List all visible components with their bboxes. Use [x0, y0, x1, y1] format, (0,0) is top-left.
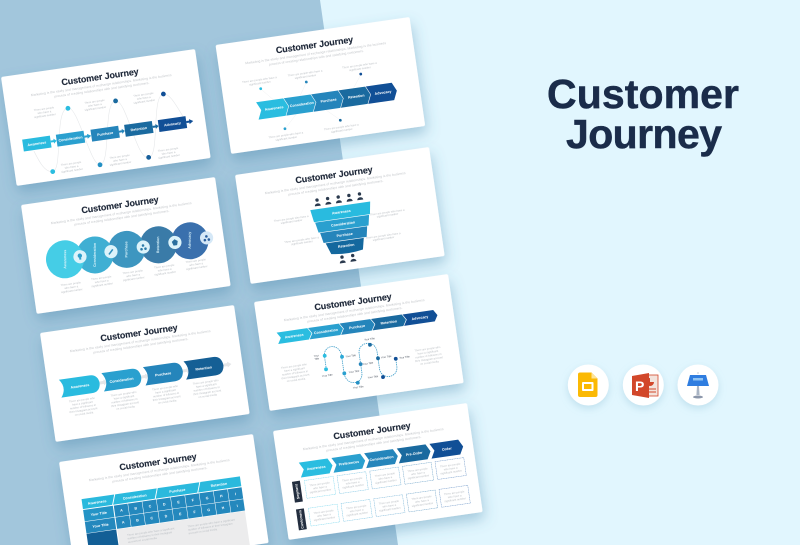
box text: significant number: [444, 496, 466, 503]
circle labels: significant number: [123, 275, 145, 282]
box text: [308, 462, 466, 522]
description: Marketing is the study and management of exchange relationships. Marketing is the business: [265, 171, 406, 195]
main title: Customer: [547, 71, 739, 117]
box text: who have a: [448, 493, 462, 499]
box text: who have a: [317, 512, 332, 518]
marker labels: significant number: [158, 153, 180, 160]
box text: who have a: [411, 470, 426, 476]
box text: There are people: [411, 494, 432, 501]
circle icons: [72, 230, 214, 264]
stage descriptions: have a significant: [196, 382, 217, 389]
panel: funnel journey slide: [235, 147, 445, 284]
description: Marketing is the study and management of exchange relationships. Marketing is the business: [70, 329, 211, 353]
chevron stages: Awareness: [265, 105, 284, 112]
marker labels: significant number: [275, 135, 298, 142]
box text: who have a: [444, 466, 458, 472]
chevron stages: [277, 310, 438, 344]
panel: curved arrows journey slide: [40, 305, 250, 442]
node labels: Your Title: [362, 361, 374, 366]
marker labels: significant number: [34, 112, 56, 119]
description: Marketing is the study and management of exchange relationships. Marketing is the business: [31, 73, 172, 97]
header stages: [82, 476, 241, 509]
marker labels: significant number: [294, 73, 317, 80]
heading: Customer Journey: [100, 322, 178, 343]
funnel: Purchase: [336, 232, 353, 238]
marker labels: significant number: [133, 98, 156, 105]
main title: Journey: [566, 111, 722, 157]
stage blocks: Consideration: [58, 135, 83, 143]
heading: Customer Journey: [314, 291, 392, 312]
stage descriptions: on social media: [158, 398, 177, 405]
curved stage shapes: Retention: [195, 365, 212, 372]
chevron stages: Purchase: [349, 324, 365, 330]
node labels: Your: [313, 353, 319, 358]
stage blocks: [22, 115, 194, 152]
funnel: [310, 201, 377, 258]
description: process of creating relationships with and satisfying customers.: [269, 49, 364, 67]
icon: powerpoint: [623, 364, 664, 406]
box text: who have a: [378, 475, 393, 481]
side paragraphs: on social media: [286, 376, 306, 383]
box text: who have a: [415, 498, 430, 504]
chevron stages: Consideration: [369, 455, 394, 462]
curved stage shapes: Awareness: [70, 383, 90, 390]
box text: There are people: [313, 508, 334, 515]
description: Marketing is the study and management of exchange relationships. Marketing is the business: [303, 427, 444, 451]
side paragraphs: have a significant: [417, 349, 439, 356]
box text: There are people: [378, 499, 400, 506]
stage descriptions: There are people who: [110, 390, 137, 398]
cell letters: I: [237, 504, 238, 508]
cell letters: G: [205, 496, 209, 500]
side paragraphs: their Instagram account: [415, 355, 443, 363]
node labels: Your Title: [348, 369, 360, 374]
box text: There are people: [374, 471, 396, 478]
marker labels: There are people: [61, 160, 82, 167]
description: process of creating relationships with and satisfying customers.: [54, 81, 150, 99]
circle labels: who have a: [126, 272, 141, 278]
stage descriptions: number of followers in: [70, 403, 97, 410]
marker labels: significant number: [109, 160, 132, 167]
funnel side labels: significant number: [377, 212, 399, 219]
row titles: Your Title: [90, 511, 107, 517]
grey notes panel: [117, 511, 250, 545]
circle labels: who have a: [64, 284, 79, 290]
row labels: Segment: [294, 483, 300, 499]
node labels: Title: [314, 356, 320, 361]
chevron stages: Awareness: [307, 465, 326, 471]
funnel side labels: There are people who have a: [366, 231, 401, 240]
funnel side labels: significant number: [281, 218, 303, 225]
marker labels: who have a: [113, 157, 128, 163]
box text: who have a: [350, 507, 364, 513]
box text: significant number: [313, 515, 336, 522]
cell letters: B: [134, 506, 138, 511]
box text: significant number: [411, 501, 434, 508]
node labels: Your Title: [345, 353, 357, 359]
cell letters: H: [221, 506, 225, 510]
cell letters: D: [163, 502, 166, 507]
circle labels: There are people: [154, 263, 175, 270]
box text: There are people: [342, 476, 363, 483]
people below funnel: [339, 253, 357, 263]
chevron stages: Awareness: [285, 333, 304, 339]
row titles: [83, 506, 121, 545]
marker labels: There are people: [133, 91, 154, 98]
node labels: [312, 332, 414, 395]
circle labels: There are people: [122, 268, 144, 275]
description: process of creating relationships with and satisfying customers.: [74, 209, 170, 227]
description: process of creating relationships with and satisfying customers.: [93, 337, 189, 355]
notes text: number of followers in their Instagram: [188, 521, 234, 532]
marker labels: significant number: [349, 65, 371, 72]
overlapping circles: Advocacy: [188, 232, 192, 249]
stage blocks: Advocacy: [164, 121, 181, 128]
marker labels: There are people who have a: [268, 130, 304, 139]
marker labels: There are people: [158, 146, 179, 153]
box text: who have a: [382, 503, 397, 509]
heading: Customer Journey: [333, 420, 411, 441]
chevron stages: Pre-Order: [406, 451, 423, 457]
marker labels: [242, 61, 386, 145]
cell letters: G: [207, 508, 211, 512]
stage descriptions: There are people who: [152, 384, 179, 392]
node labels: Your Title: [399, 354, 411, 360]
icon: keynote: [678, 364, 718, 406]
funnel side labels: significant number: [372, 235, 395, 242]
stage descriptions: There are people who: [192, 378, 219, 386]
heading: Customer Journey: [295, 164, 373, 185]
cell letters: H: [220, 494, 223, 498]
marker labels: significant number: [331, 127, 353, 134]
row labels: Customers: [298, 510, 305, 529]
circle labels: significant number: [186, 264, 208, 271]
chevron stages: [256, 82, 398, 120]
chevron stages: Advocacy: [411, 315, 429, 321]
chevron stages: Order: [442, 446, 453, 452]
header stages: Purchase: [169, 488, 186, 494]
cell letters: [120, 492, 238, 525]
chevron stages: Retention: [348, 93, 365, 100]
box text: significant number: [375, 478, 397, 485]
path nodes: [321, 339, 401, 389]
box text: There are people: [407, 466, 428, 473]
chevron stages: Advocacy: [374, 90, 392, 96]
side paragraphs: [280, 343, 444, 386]
marker labels: There are people who have a: [242, 75, 277, 84]
notes text: There are people who have a significant: [127, 526, 175, 537]
box text: who have a: [313, 484, 328, 490]
heading: Customer Journey: [275, 34, 354, 55]
panel: wave journey slide: [1, 49, 211, 186]
stage descriptions: number of followers in: [153, 391, 180, 399]
node labels: Your Title: [353, 384, 364, 390]
chevron stages: Consideration: [314, 328, 338, 335]
circle labels: who have a: [158, 267, 172, 273]
marker labels: There are people: [109, 153, 130, 160]
table cells: [114, 487, 245, 529]
panel: circles journey slide: [21, 177, 231, 314]
circle labels: who have a: [95, 278, 109, 284]
heading: Customer Journey: [61, 66, 139, 87]
notes text: account on social media: [188, 527, 218, 535]
box text: significant number: [346, 510, 368, 517]
circle labels: significant number: [91, 281, 113, 288]
stage descriptions: their Instagram account: [111, 400, 139, 408]
side paragraphs: number of followers in: [282, 369, 309, 377]
panel: matrix journey slide: [273, 403, 483, 540]
stage descriptions: number of followers in: [111, 397, 138, 404]
box text: There are people: [346, 503, 367, 510]
markers: [259, 72, 368, 133]
side paragraphs: on social media: [420, 359, 439, 366]
box text: There are people: [444, 489, 465, 496]
box text: significant number: [379, 506, 401, 513]
cell letters: E: [177, 500, 181, 505]
side paragraphs: have a significant: [284, 366, 305, 373]
side paragraphs: number of followers in: [415, 352, 442, 360]
node labels: Your Title: [322, 372, 333, 378]
box text: who have a: [346, 480, 360, 486]
funnel side labels: significant number: [291, 239, 313, 246]
funnel side labels: There are people who have a: [274, 214, 309, 223]
description: process of creating relationships with and satisfying customers.: [112, 466, 208, 484]
description: process of creating relationships with and satisfying customers.: [326, 435, 422, 453]
marker labels: There are people: [84, 98, 105, 105]
curved stage shapes: Purchase: [155, 371, 171, 377]
connector lines: [261, 75, 367, 132]
stage descriptions: have a significant: [155, 388, 176, 395]
marker labels: There are people who have a: [287, 68, 323, 77]
notes text: account on social media: [128, 536, 157, 544]
curved stage shapes: [59, 355, 233, 398]
overlapping circles: Consideration: [93, 243, 97, 267]
header stages: Consideration: [123, 493, 147, 501]
heading: Customer Journey: [119, 451, 197, 472]
node labels: Your Title: [381, 354, 392, 359]
stage blocks: Purchase: [97, 131, 113, 137]
stage descriptions: their Instagram account: [152, 394, 181, 402]
cell letters: F: [193, 510, 197, 514]
panel: table journey slide: [59, 434, 269, 545]
circle labels: significant number: [154, 270, 176, 277]
marker labels: who have a: [88, 102, 103, 108]
marker labels: There are people: [34, 105, 55, 112]
icon: powerpoint: P: [635, 378, 644, 394]
box text: significant number: [342, 483, 364, 490]
panel: winding path journey slide: [254, 274, 464, 411]
funnel: Consideration: [331, 220, 355, 228]
cell letters: D: [164, 514, 168, 518]
funnel: Awareness: [332, 209, 351, 216]
funnel side labels: [274, 200, 409, 256]
box text: significant number: [440, 468, 462, 476]
chevron stages: Retention: [380, 319, 397, 326]
header stages: Retention: [210, 482, 227, 488]
cell letters: A: [122, 520, 125, 525]
box text: significant number: [407, 473, 430, 480]
curved stage shapes: Consideration: [109, 377, 134, 384]
stage descriptions: have a significant: [72, 400, 93, 407]
side paragraphs: There are people who: [281, 362, 308, 370]
stage descriptions: number of followers in: [193, 385, 220, 393]
marker labels: who have a: [137, 95, 151, 101]
row titles: Your Title: [92, 523, 109, 529]
overlapping circles: [43, 219, 211, 281]
marker labels: significant number: [249, 80, 271, 87]
box text: There are people: [440, 462, 461, 469]
chevron stages: Consideration: [290, 101, 314, 108]
description: Marketing is the study and management of exchange relationships. Marketing is the business: [284, 298, 425, 322]
cell letters: F: [191, 498, 195, 502]
circle labels: There are people: [91, 274, 112, 281]
chevron stages: [299, 439, 464, 477]
wave markers: [41, 91, 175, 174]
overlapping circles: Awareness: [63, 250, 67, 269]
circle labels: who have a: [189, 261, 204, 267]
box text: significant number: [309, 487, 332, 494]
circle labels: There are people: [60, 280, 82, 287]
box text: There are people: [309, 480, 330, 487]
marker labels: who have a: [37, 109, 52, 115]
marker labels: There are people who have a: [342, 61, 378, 70]
stage descriptions: their Instagram account: [193, 388, 222, 396]
chevron stages: Purchase: [320, 98, 337, 104]
funnel: Retention: [338, 243, 355, 249]
stage blocks: Retention: [130, 126, 147, 132]
description: Marketing is the study and management of exchange relationships. Marketing is the business: [89, 458, 230, 482]
description: Marketing is the study and management of exchange relationships. Marketing is the business: [51, 201, 192, 225]
stage descriptions: on social media: [198, 392, 218, 399]
node labels: Your Title: [364, 336, 376, 342]
chevron stages: Preferences: [338, 460, 359, 467]
circle labels: [59, 257, 209, 294]
cell letters: C: [150, 516, 154, 521]
marker labels: who have a: [161, 150, 176, 156]
panel: chevron journey slide: [216, 17, 425, 154]
notes text: [127, 518, 236, 544]
stage descriptions: their Instagram account: [69, 406, 98, 414]
marker labels: who have a: [64, 164, 79, 170]
circle labels: significant number: [61, 287, 83, 294]
cell letters: B: [136, 518, 139, 523]
stage descriptions: [68, 378, 222, 418]
dashed winding path: [323, 338, 398, 386]
row labels: [292, 481, 307, 530]
stage descriptions: There are people who: [69, 396, 96, 404]
wave line: [28, 92, 189, 174]
cell letters: I: [235, 492, 236, 496]
description: Marketing is the study and management of exchange relationships. Marketing is the business: [245, 41, 387, 65]
description: process of creating relationships with and satisfying customers.: [288, 179, 384, 197]
description: process of creating relationships with and satisfying customers.: [307, 306, 403, 324]
header stages: Awareness: [88, 499, 107, 506]
circle labels: There are people: [185, 257, 207, 264]
stage descriptions: have a significant: [113, 394, 135, 401]
notes text: There are people who have a significant: [187, 518, 235, 528]
marker labels: significant number: [84, 105, 107, 112]
stage descriptions: on social media: [74, 410, 94, 417]
cell letters: A: [120, 508, 124, 513]
funnel side labels: There are people who have a: [284, 235, 320, 244]
side paragraphs: There are people who: [414, 345, 441, 353]
notes text: number of followers in their Instagram: [127, 530, 173, 540]
people above funnel: [314, 192, 363, 206]
dashed boxes: [304, 458, 470, 526]
cell letters: E: [179, 512, 182, 516]
icon: google slides: [568, 364, 609, 406]
marker labels: There are people who have a: [324, 122, 359, 131]
heading: Customer Journey: [81, 194, 159, 215]
main title: [547, 71, 739, 157]
marker labels: [33, 88, 180, 177]
overlapping circles: Purchase: [124, 241, 128, 258]
side paragraphs: their Instagram account: [281, 372, 310, 380]
overlapping circles: Retention: [156, 237, 160, 253]
cell letters: C: [148, 504, 152, 509]
funnel side labels: There are people who have a: [370, 208, 405, 217]
marker labels: significant number: [61, 167, 83, 174]
stage blocks: Awareness: [27, 141, 47, 147]
node labels: Your Title: [367, 374, 379, 380]
stage descriptions: on social media: [116, 404, 136, 411]
